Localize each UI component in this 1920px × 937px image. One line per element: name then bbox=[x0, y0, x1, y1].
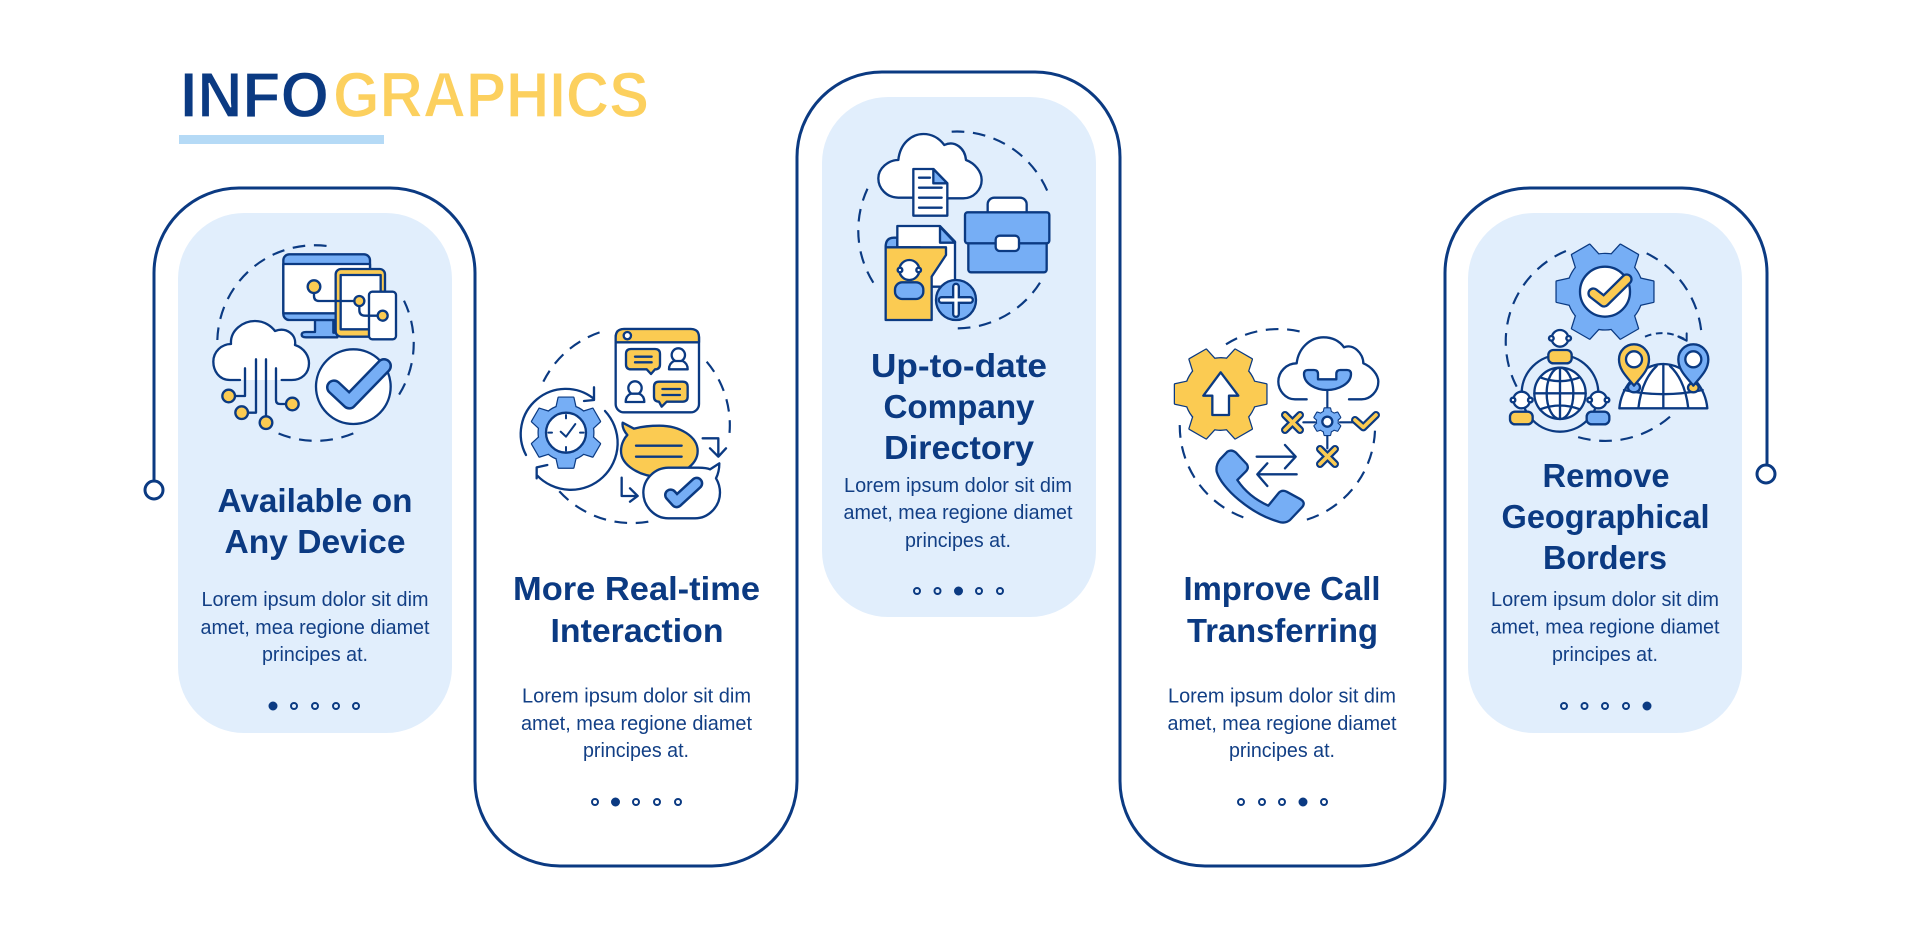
title bbox=[180, 59, 649, 131]
icon: chat window, clock gear and bubbles bbox=[521, 329, 730, 523]
icon: gear, globe, people and map pins bbox=[1506, 226, 1708, 441]
body text bbox=[200, 589, 430, 666]
heading: Improve Call bbox=[1184, 570, 1380, 607]
panel: up-to-date company directory bbox=[822, 97, 1096, 617]
pagination dots bbox=[1561, 702, 1650, 710]
heading: Available on bbox=[218, 482, 412, 519]
title: INFO bbox=[180, 59, 329, 131]
body text: Lorem ipsum dolor sit dim bbox=[202, 589, 428, 611]
heading bbox=[871, 347, 1047, 466]
body text bbox=[1168, 686, 1397, 762]
card background bbox=[178, 213, 452, 733]
heading: Remove bbox=[1542, 457, 1670, 494]
body text bbox=[844, 475, 1073, 552]
body text: amet, mea regione diamet bbox=[1490, 616, 1720, 638]
heading: More Real-time bbox=[513, 570, 760, 607]
body text: principes at. bbox=[905, 530, 1011, 552]
pagination dots bbox=[1238, 798, 1327, 806]
heading: Borders bbox=[1543, 539, 1667, 576]
heading: Company bbox=[884, 388, 1035, 425]
panel: improve call transferring bbox=[1158, 329, 1397, 806]
body text: Lorem ipsum dolor sit dim bbox=[844, 475, 1072, 497]
heading: Directory bbox=[884, 429, 1035, 466]
heading: Any Device bbox=[224, 523, 406, 560]
card background bbox=[1468, 213, 1742, 733]
heading bbox=[218, 482, 412, 560]
body text bbox=[1490, 589, 1720, 666]
body text: principes at. bbox=[262, 644, 368, 666]
panel: available on any device bbox=[178, 213, 452, 733]
icon: cloud, document, folder and briefcase bbox=[858, 132, 1049, 328]
heading: Interaction bbox=[550, 612, 724, 649]
body text: amet, mea regione diamet bbox=[844, 502, 1073, 524]
title: GRAPHICS bbox=[333, 59, 649, 131]
title underline bbox=[179, 135, 384, 144]
panel: more real-time interaction bbox=[513, 329, 760, 806]
body text: amet, mea regione diamet bbox=[1168, 713, 1397, 735]
body text: principes at. bbox=[1229, 740, 1335, 762]
heading: Up-to-date bbox=[871, 347, 1047, 384]
body text: amet, mea regione diamet bbox=[521, 713, 752, 735]
pagination dots bbox=[270, 702, 359, 710]
heading bbox=[513, 570, 760, 649]
icon: devices, cloud and check bbox=[213, 245, 414, 441]
heading: Transferring bbox=[1187, 612, 1378, 649]
heading bbox=[1184, 570, 1380, 649]
body text: Lorem ipsum dolor sit dim bbox=[1491, 589, 1719, 611]
panel: remove geographical borders bbox=[1468, 213, 1742, 733]
body text: amet, mea regione diamet bbox=[200, 617, 430, 639]
body text: Lorem ipsum dolor sit dim bbox=[522, 686, 751, 708]
card background bbox=[822, 97, 1096, 617]
heading bbox=[1502, 457, 1710, 576]
heading: Geographical bbox=[1502, 498, 1710, 535]
connector line bbox=[145, 72, 1775, 866]
body text: Lorem ipsum dolor sit dim bbox=[1168, 686, 1396, 708]
body text: principes at. bbox=[1552, 644, 1658, 666]
pagination dots bbox=[592, 798, 681, 806]
icon: gear, cloud phone and handset bbox=[1158, 329, 1378, 523]
body text: principes at. bbox=[583, 740, 689, 762]
body text bbox=[521, 686, 752, 762]
pagination dots bbox=[914, 588, 1003, 594]
